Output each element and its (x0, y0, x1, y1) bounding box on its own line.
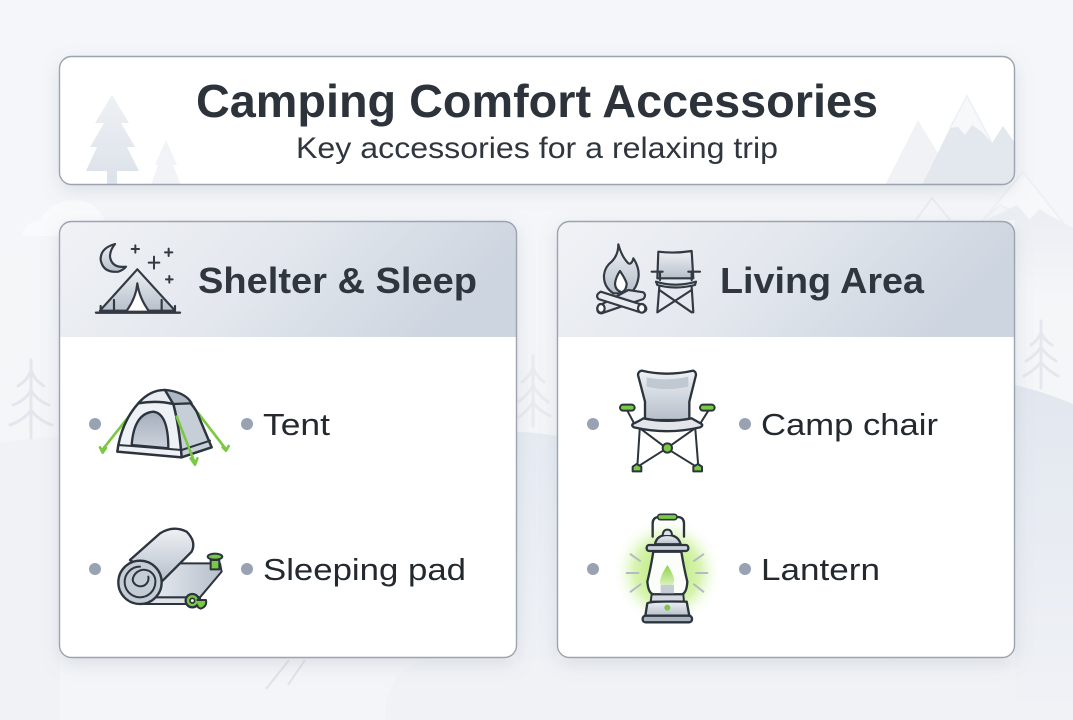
icon: sleeping pad (118, 529, 222, 609)
panel: Shelter & Sleep (59, 221, 517, 658)
panel heading: Shelter & Sleep (198, 260, 477, 301)
bullet (587, 418, 599, 430)
icon: tent (100, 390, 229, 465)
list item: Sleeping pad (89, 529, 466, 609)
bullet (89, 418, 101, 430)
bullet (587, 563, 599, 575)
icon: campfire and chair (597, 244, 700, 313)
bullet (739, 418, 751, 430)
list item: Tent (89, 390, 330, 465)
icon: camp chair (620, 371, 715, 471)
list item: Camp chair (587, 371, 938, 471)
bullet (739, 563, 751, 575)
panel heading: Living Area (720, 260, 925, 301)
bullet (241, 418, 253, 430)
label: Camp chair (761, 407, 938, 442)
panel header band (59, 221, 517, 337)
panel header band (557, 221, 1015, 337)
list item: Lantern (587, 514, 880, 627)
label: Lantern (761, 552, 880, 587)
panel: Living Area (557, 221, 1015, 658)
panel: title banner (59, 56, 1015, 185)
bullet (241, 563, 253, 575)
icon: moon, stars and tent (96, 244, 180, 313)
icon: lantern (612, 514, 722, 627)
label: Sleeping pad (263, 552, 466, 587)
bullet (89, 563, 101, 575)
title banner scenery (86, 95, 1015, 185)
subtitle: Key accessories for a relaxing trip (296, 132, 778, 165)
title: Camping Comfort Accessories (196, 75, 878, 127)
label: Tent (263, 407, 330, 442)
